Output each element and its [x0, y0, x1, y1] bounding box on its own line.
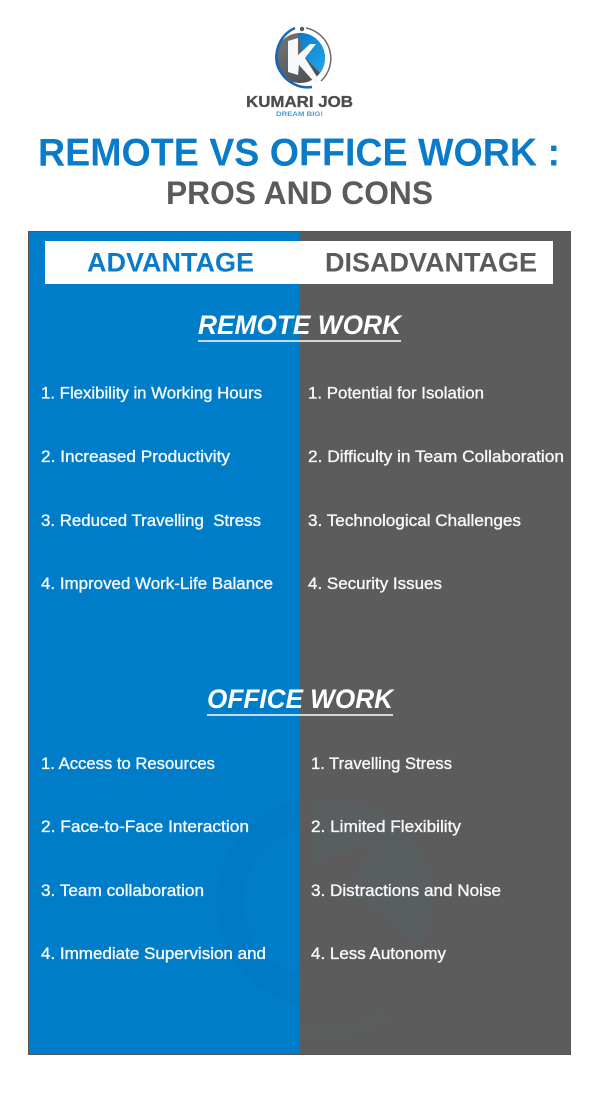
list: remote disadvantages: 4. Security Issues [308, 575, 442, 593]
list: remote disadvantages [308, 385, 564, 593]
panel border [28, 232, 570, 1054]
section heading: office work: OFFICE WORK [207, 684, 395, 714]
list: remote disadvantages: 2. Difficulty in Team Collaboration [308, 448, 564, 466]
header: disadvantage: DISADVANTAGE [325, 248, 537, 278]
logo tagline: DREAM BIG! [276, 112, 323, 118]
list: office disadvantages: 3. Distractions and Noise [311, 882, 501, 900]
section heading: remote work: REMOTE WORK [198, 310, 403, 340]
list: office disadvantages: 1. Travelling Stress [311, 755, 452, 773]
watermark lower arc [300, 1015, 386, 1034]
list: office disadvantages: 2. Limited Flexibility [311, 818, 462, 836]
subtitle: PROS AND CONS [166, 175, 433, 211]
list: office advantages: 3. Team collaboration [41, 882, 204, 900]
list: office advantages: 2. Face-to-Face Interaction [41, 818, 249, 836]
list: remote advantages: 4. Improved Work-Life Balance [41, 575, 273, 593]
list: office advantages: 4. Immediate Supervision and [41, 945, 266, 963]
comparison panel [28, 231, 571, 1055]
list: remote disadvantages: 1. Potential for Isolation [308, 385, 484, 403]
header background [45, 241, 553, 284]
list: office disadvantages: 4. Less Autonomy [311, 945, 447, 963]
list: remote advantages: 2. Increased Productivity [41, 448, 231, 466]
list: remote disadvantages: 3. Technological Challenges [308, 512, 521, 530]
list: office disadvantages [311, 755, 501, 963]
list: remote advantages: 1. Flexibility in Working Hours [41, 385, 262, 403]
list: remote advantages: 3. Reduced Travelling Stress [41, 512, 261, 530]
list: remote advantages [41, 385, 273, 593]
header bar [45, 241, 553, 284]
watermark logo [217, 800, 433, 1034]
title: REMOTE VS OFFICE WORK : [38, 132, 560, 174]
logo: Kumari Job [246, 27, 353, 118]
header: advantage: ADVANTAGE [87, 248, 254, 278]
watermark ring on blue [217, 800, 299, 1005]
panel: advantage column [28, 231, 300, 1055]
list: office advantages: 1. Access to Resources [41, 755, 215, 773]
panel: disadvantage column [300, 231, 571, 1055]
list: office advantages [41, 755, 266, 963]
logo disc [275, 27, 331, 87]
watermark sector on gray [313, 801, 433, 947]
logo wordmark: KUMARI JOB [246, 94, 353, 111]
